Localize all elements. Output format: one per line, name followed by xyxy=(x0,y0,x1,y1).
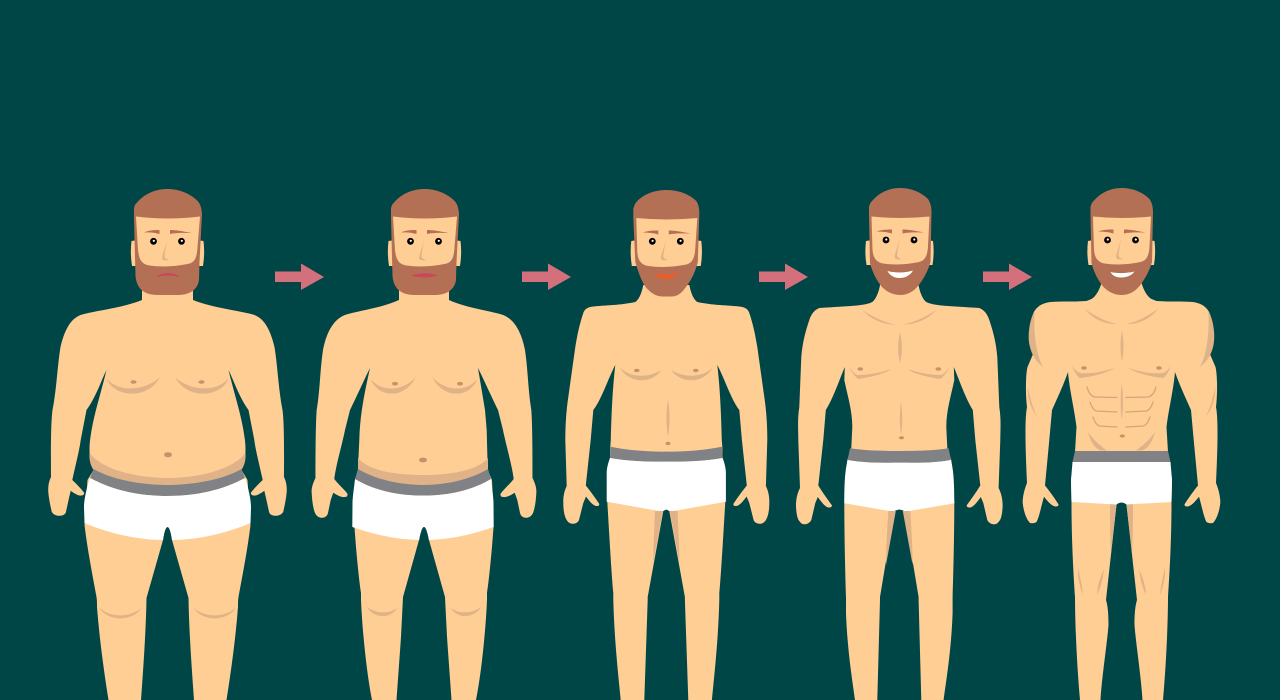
figure 4: toned man xyxy=(796,188,1003,700)
sternum, abdominal line and navel: figure 5 xyxy=(1120,330,1125,438)
body half: figure 3 xyxy=(563,285,667,700)
underwear centre seam cover: figure 5 xyxy=(1120,451,1124,502)
arrow 3 xyxy=(759,264,808,290)
navel: figure 1 xyxy=(164,452,172,457)
arrow 4 xyxy=(983,264,1032,290)
underwear: figure 2 xyxy=(352,458,494,540)
figure 3: slim man xyxy=(563,190,769,700)
right waist edge correction: figure 2 xyxy=(478,368,492,480)
body half: figure 4 xyxy=(796,283,900,700)
head: figure 2, neutral face xyxy=(388,189,461,295)
body half mirrored: figure 5 xyxy=(1120,283,1220,700)
head: figure 5, big smile xyxy=(1087,188,1155,295)
body half: figure 1 xyxy=(48,285,168,700)
arrow 2 xyxy=(522,264,571,290)
body half: figure 5 xyxy=(1023,283,1122,700)
crotch gap: figure 2 xyxy=(419,527,429,541)
body half mirrored: figure 1 xyxy=(166,285,287,700)
abdominal line and navel: figure 3 xyxy=(665,400,671,445)
underwear centre seam cover: figure 3 xyxy=(664,452,668,510)
underwear centre seam cover: figure 1 xyxy=(166,479,170,526)
body half mirrored: figure 3 xyxy=(665,285,769,700)
underwear half: figure 2 xyxy=(352,458,424,540)
arrow 1 xyxy=(275,264,324,290)
figure 5: muscular man xyxy=(1023,188,1220,700)
sternum, abdominal line and navel: figure 4 xyxy=(898,332,904,439)
underwear half mirrored: figure 2 xyxy=(422,458,494,540)
head: figure 1, sad face with full beard xyxy=(131,189,204,295)
body half mirrored: figure 2 xyxy=(423,285,536,700)
figure 2: overweight man xyxy=(312,189,536,700)
body half: figure 2 xyxy=(312,285,425,700)
body half mirrored: figure 4 xyxy=(898,283,1003,700)
underwear centre seam cover: figure 4 xyxy=(897,451,901,510)
figure 1: obese man xyxy=(48,189,287,700)
nipples and navel: figure 2 xyxy=(392,382,463,462)
head: figure 4, smiling face xyxy=(865,188,934,295)
head: figure 3, slight smile xyxy=(631,190,702,296)
